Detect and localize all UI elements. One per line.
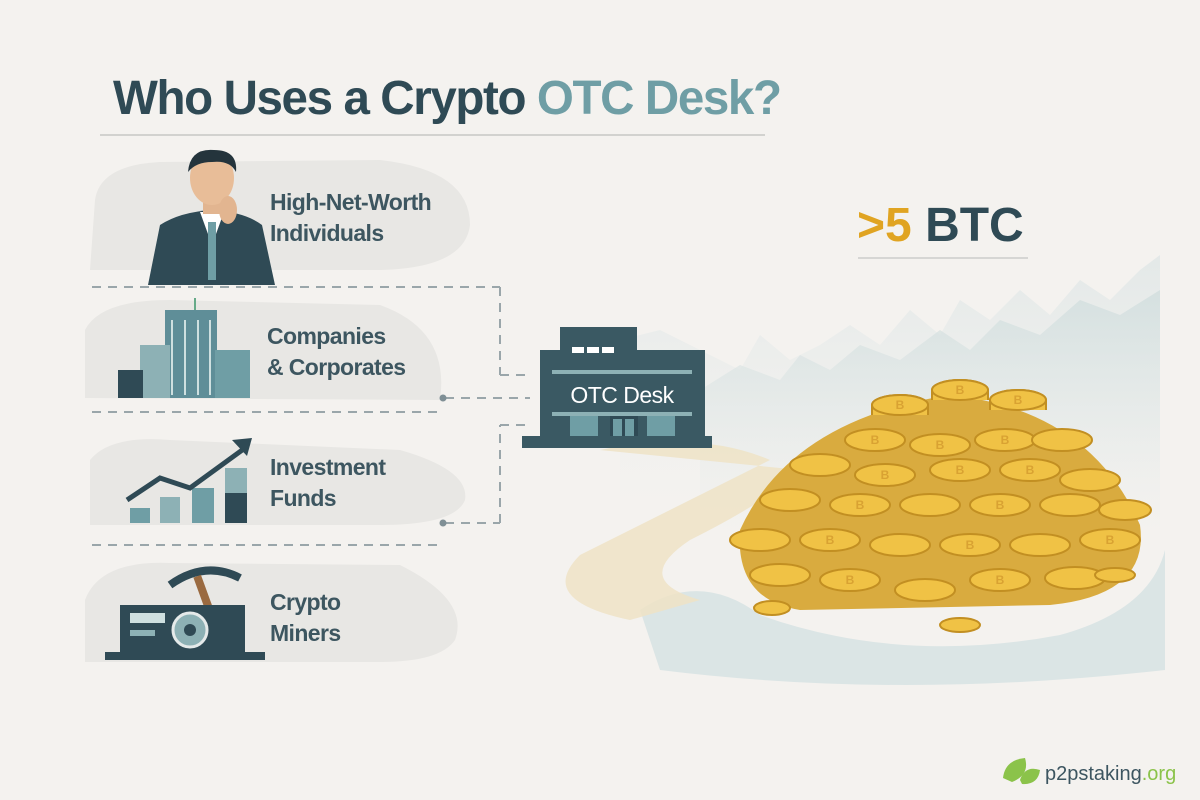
coin pile: B bbox=[856, 498, 865, 512]
OTC desk building: OTC Desk bbox=[570, 382, 675, 408]
label: miners: Miners bbox=[270, 620, 341, 646]
background mountains bbox=[620, 255, 1165, 685]
coin pile: B bbox=[936, 438, 945, 452]
coin pile: B bbox=[1014, 393, 1023, 407]
title underline bbox=[100, 134, 765, 136]
coin pile: B bbox=[1001, 433, 1010, 447]
BTC underline bbox=[858, 257, 1028, 259]
coin pile: B bbox=[956, 463, 965, 477]
icon: mining rig bbox=[105, 570, 265, 660]
coin pile: B bbox=[846, 573, 855, 587]
icon: growth chart bbox=[127, 438, 252, 523]
BTC threshold: >5 BTC bbox=[857, 199, 1024, 252]
label: high-net-worth: Individuals bbox=[270, 220, 384, 246]
logo icon bbox=[1003, 758, 1040, 784]
coin pile: B bbox=[996, 573, 1005, 587]
label: companies: & Corporates bbox=[267, 354, 406, 380]
icon: businessman bbox=[148, 150, 275, 285]
road path bbox=[566, 442, 800, 620]
label: miners: Crypto bbox=[270, 589, 341, 615]
coin pile: B bbox=[996, 498, 1005, 512]
label: high-net-worth: High-Net-Worth bbox=[270, 189, 431, 215]
coin pile: B bbox=[1026, 463, 1035, 477]
coin pile bbox=[730, 380, 1151, 632]
title: Who Uses a Crypto OTC Desk? bbox=[113, 72, 781, 125]
coin pile: B bbox=[871, 433, 880, 447]
label: companies bbox=[267, 323, 406, 380]
label: high-net-worth bbox=[270, 189, 431, 246]
coin pile: B bbox=[826, 533, 835, 547]
coin pile: B bbox=[881, 468, 890, 482]
row blobs bbox=[85, 160, 470, 662]
label: funds: Funds bbox=[270, 485, 336, 511]
coin pile: B bbox=[966, 538, 975, 552]
OTC desk building bbox=[522, 327, 712, 448]
coin pile: B bbox=[1106, 533, 1115, 547]
coin pile: B bbox=[956, 383, 965, 397]
label: companies: Companies bbox=[267, 323, 386, 349]
label: funds: Investment bbox=[270, 454, 385, 480]
label: miners bbox=[270, 589, 341, 646]
icon: buildings bbox=[118, 298, 250, 398]
logo text: p2pstaking.org bbox=[1045, 763, 1176, 785]
dashed connectors bbox=[92, 287, 530, 545]
coin pile: B bbox=[896, 398, 905, 412]
label: funds bbox=[270, 454, 386, 511]
